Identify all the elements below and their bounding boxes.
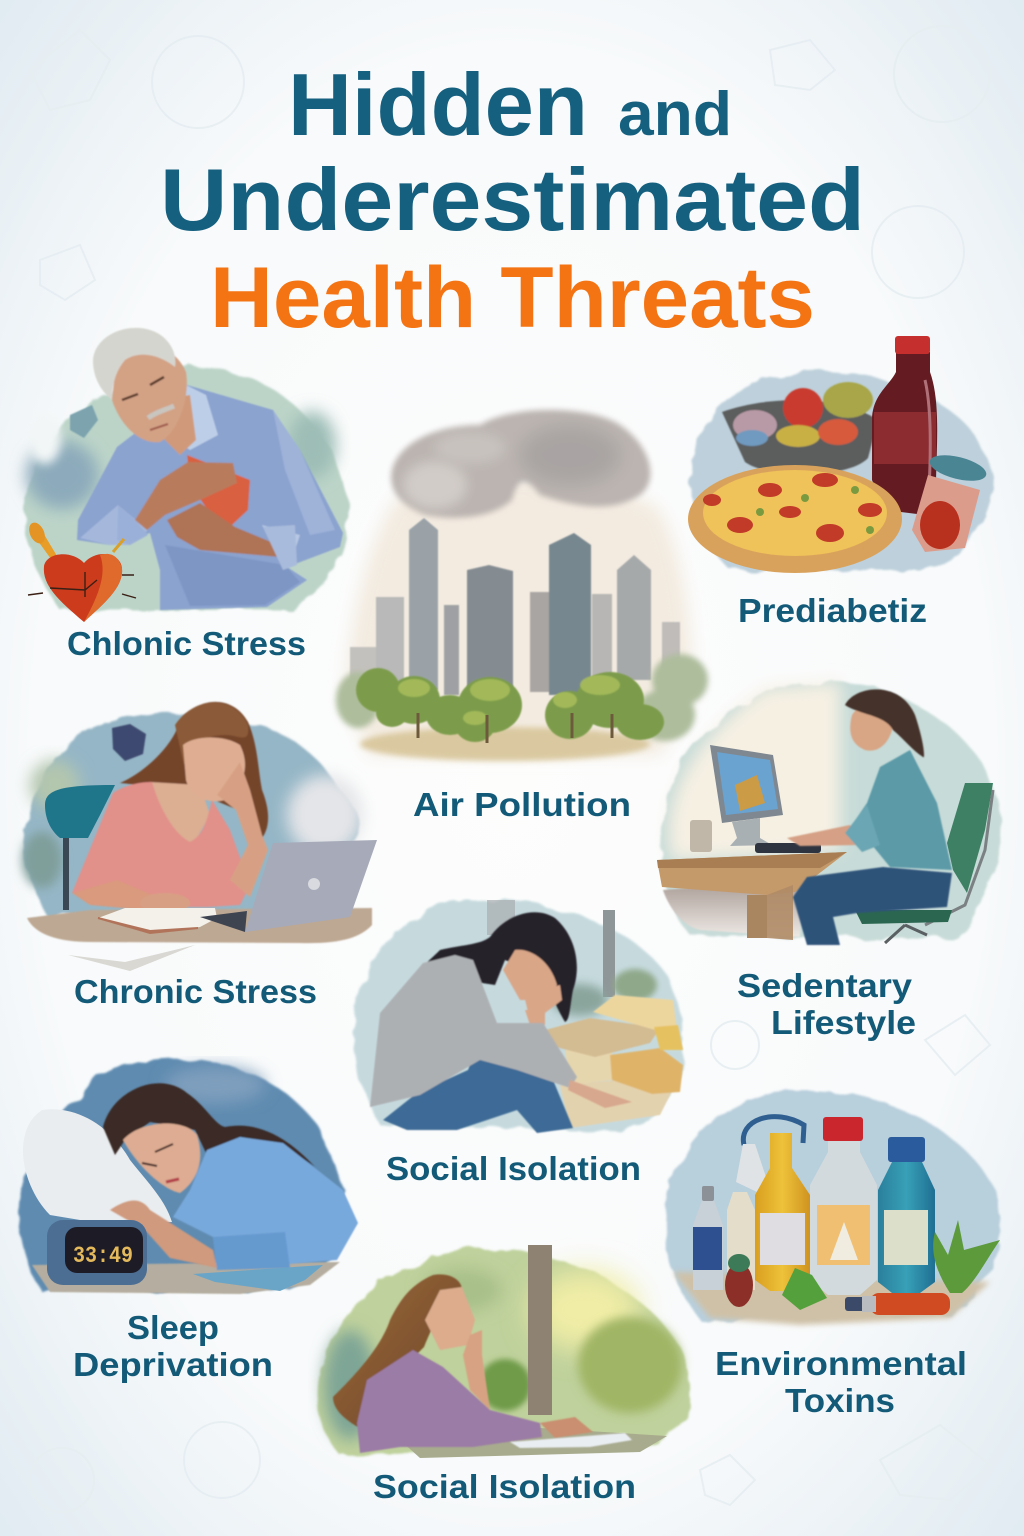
panel: social isolation gray sweater [354, 900, 684, 1187]
haze backdrop [345, 479, 691, 755]
label: Prediabetiz [738, 592, 927, 629]
panel: environmental toxins [666, 1091, 1000, 1419]
watercolor backdrop [25, 367, 348, 610]
watercolor backdrop [318, 1249, 691, 1455]
title: Hidden [288, 55, 588, 154]
papers [193, 1265, 323, 1291]
label: Air Pollution [413, 786, 631, 823]
under-desk shade [663, 880, 803, 937]
label [73, 1309, 273, 1383]
skyline [350, 518, 680, 695]
alarm clock [47, 1220, 147, 1285]
label: Social Isolation [373, 1468, 636, 1505]
label: Toxins [785, 1382, 895, 1419]
man figure [77, 328, 343, 610]
panel: social isolation window [318, 1245, 691, 1505]
label: Chlonic Stress [67, 625, 306, 662]
panel: chronic stress laptop woman [22, 702, 377, 1010]
title: Health Threats [210, 250, 815, 346]
computer monitor [690, 745, 821, 853]
woman figure [333, 1274, 632, 1453]
pizza [688, 465, 902, 573]
table [32, 1262, 340, 1294]
panel: sleep deprivation [19, 1058, 358, 1383]
panel: sedentary lifestyle [657, 682, 1001, 1041]
pillow [23, 1109, 172, 1225]
label: Sedentary [737, 967, 913, 1004]
watercolor backdrop [661, 682, 1001, 940]
smoke cloud [391, 410, 650, 518]
soda bottle [872, 336, 937, 515]
label [715, 1345, 967, 1419]
title [160, 55, 865, 346]
label: Sleep [127, 1309, 219, 1346]
laptop [200, 840, 377, 932]
woman figure [787, 689, 952, 945]
window post [528, 1245, 552, 1415]
bowl of food [722, 382, 878, 474]
alarm clock: 33:49 [73, 1243, 133, 1269]
label [737, 967, 916, 1041]
chair [45, 785, 115, 910]
desk [657, 852, 847, 940]
panel: air pollution [336, 410, 708, 823]
panel: chronic stress man [25, 328, 348, 662]
sleeping woman [103, 1083, 358, 1270]
label: Environmental [715, 1345, 967, 1382]
table [400, 1428, 667, 1458]
table and papers [27, 908, 372, 971]
label: Deprivation [73, 1346, 273, 1383]
title: and [618, 80, 732, 149]
bottles [693, 1117, 935, 1307]
watercolor backdrop [22, 712, 363, 915]
label: Social Isolation [386, 1150, 641, 1187]
jar [912, 450, 989, 552]
label: Lifestyle [771, 1004, 916, 1041]
title: Underestimated [160, 150, 865, 249]
stacked blocks [545, 995, 683, 1128]
watercolor backdrop [354, 900, 684, 1130]
plants and tool [782, 1220, 1000, 1315]
chair [855, 783, 993, 943]
woman figure [370, 912, 632, 1133]
icon: cracked heart [26, 520, 136, 622]
trees and ground [336, 654, 708, 761]
panel: prediabetes food [688, 336, 993, 629]
watercolor backdrop [688, 371, 993, 570]
watercolor backdrop [19, 1058, 345, 1290]
woman figure [72, 702, 268, 913]
label: Chronic Stress [74, 973, 317, 1010]
watercolor backdrop [666, 1091, 1000, 1325]
